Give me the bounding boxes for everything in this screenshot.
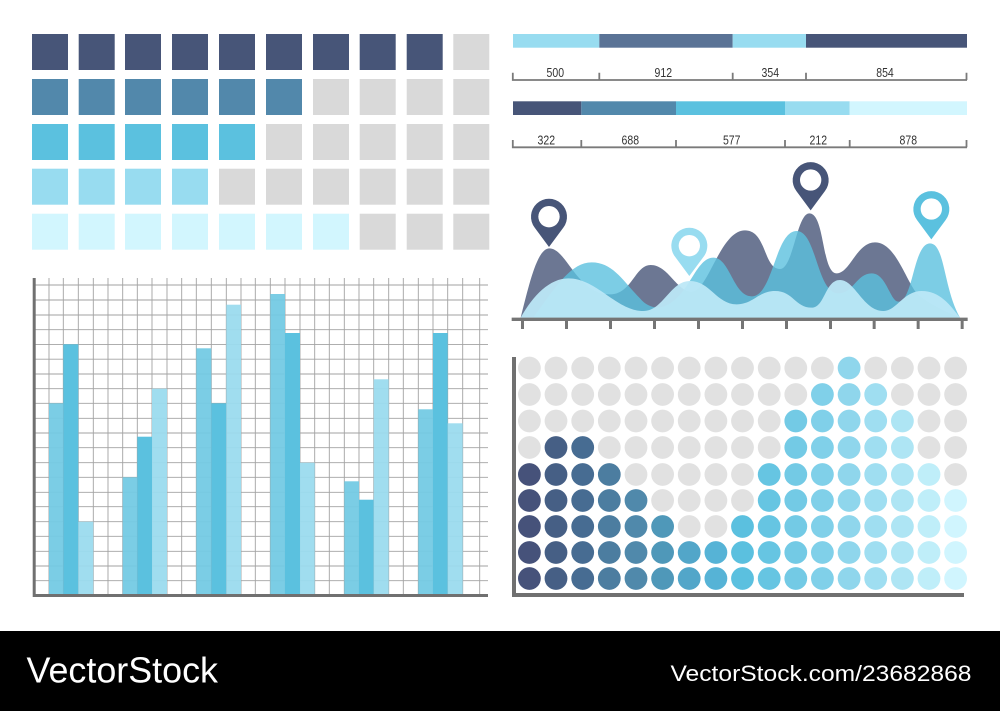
icon: map pin 4 (913, 191, 949, 239)
chart grid (35, 278, 488, 594)
column 17 (944, 357, 967, 590)
scale values 2: 577 (723, 132, 740, 147)
column 6 (651, 357, 674, 590)
panel: segmented bar 2 (513, 101, 967, 147)
bar group 6 (418, 333, 463, 594)
dot chart axes (512, 357, 964, 597)
row 3: sky blue squares (32, 124, 489, 160)
area series: dark (521, 213, 960, 318)
stacked bar 2 (513, 101, 967, 115)
panel: grouped bar chart (33, 278, 488, 597)
bar group 3 (196, 305, 241, 594)
bar group 5 (344, 379, 389, 594)
scale bracket 1 (513, 73, 967, 80)
scale values 1 (547, 65, 894, 80)
column 8 (704, 357, 727, 590)
panel: segmented bar 1 (513, 34, 967, 80)
row 4: light blue squares (32, 169, 489, 205)
row 1: dark navy squares (32, 34, 489, 70)
scale values 2: 688 (622, 132, 639, 147)
column 10 (758, 357, 781, 590)
icon: map pin 3 (793, 162, 829, 210)
scale values 2 (538, 132, 917, 147)
column 9 (731, 357, 754, 590)
column 16 (918, 357, 940, 590)
row 5: pale blue squares (32, 214, 489, 250)
scale values 2: 878 (900, 132, 917, 147)
panel: area chart with map pins (512, 162, 968, 329)
column 15 (891, 357, 914, 590)
column 13 (838, 357, 860, 590)
chart axis with ticks (512, 318, 968, 329)
scale values 1: 912 (655, 65, 672, 80)
column 7 (678, 357, 701, 590)
bar group 1 (49, 344, 93, 594)
row 2: steel blue squares (32, 79, 489, 115)
panel: square waffle chart (32, 34, 489, 250)
column 14 (864, 357, 887, 590)
bar group 4 (270, 294, 315, 594)
footer image id: VectorStock.com/23682868 (670, 661, 972, 686)
icon: map pin 1 (531, 199, 567, 247)
scale values 2: 322 (538, 132, 555, 147)
scale bracket 2 (513, 140, 967, 147)
column 3 (571, 357, 594, 590)
column 4 (598, 357, 621, 590)
scale values 1: 500 (547, 65, 564, 80)
column 5 (625, 357, 647, 590)
panel: dot matrix chart (512, 357, 967, 597)
bar group 2 (123, 389, 167, 594)
column 2 (545, 357, 567, 590)
column 1 (518, 357, 541, 590)
column 11 (784, 357, 807, 590)
scale values 1: 854 (876, 65, 894, 80)
scale values 2: 212 (810, 132, 827, 147)
footer logo wordmark: VectorStock (26, 650, 219, 690)
area series: light blue (521, 278, 960, 318)
stacked bar 1 (513, 34, 967, 48)
area series: medium blue (533, 231, 960, 318)
footer banner (0, 631, 1000, 711)
column 12 (811, 357, 834, 590)
scale values 1: 354 (762, 65, 779, 80)
icon: map pin 2 (671, 228, 707, 276)
chart axes (33, 278, 488, 597)
